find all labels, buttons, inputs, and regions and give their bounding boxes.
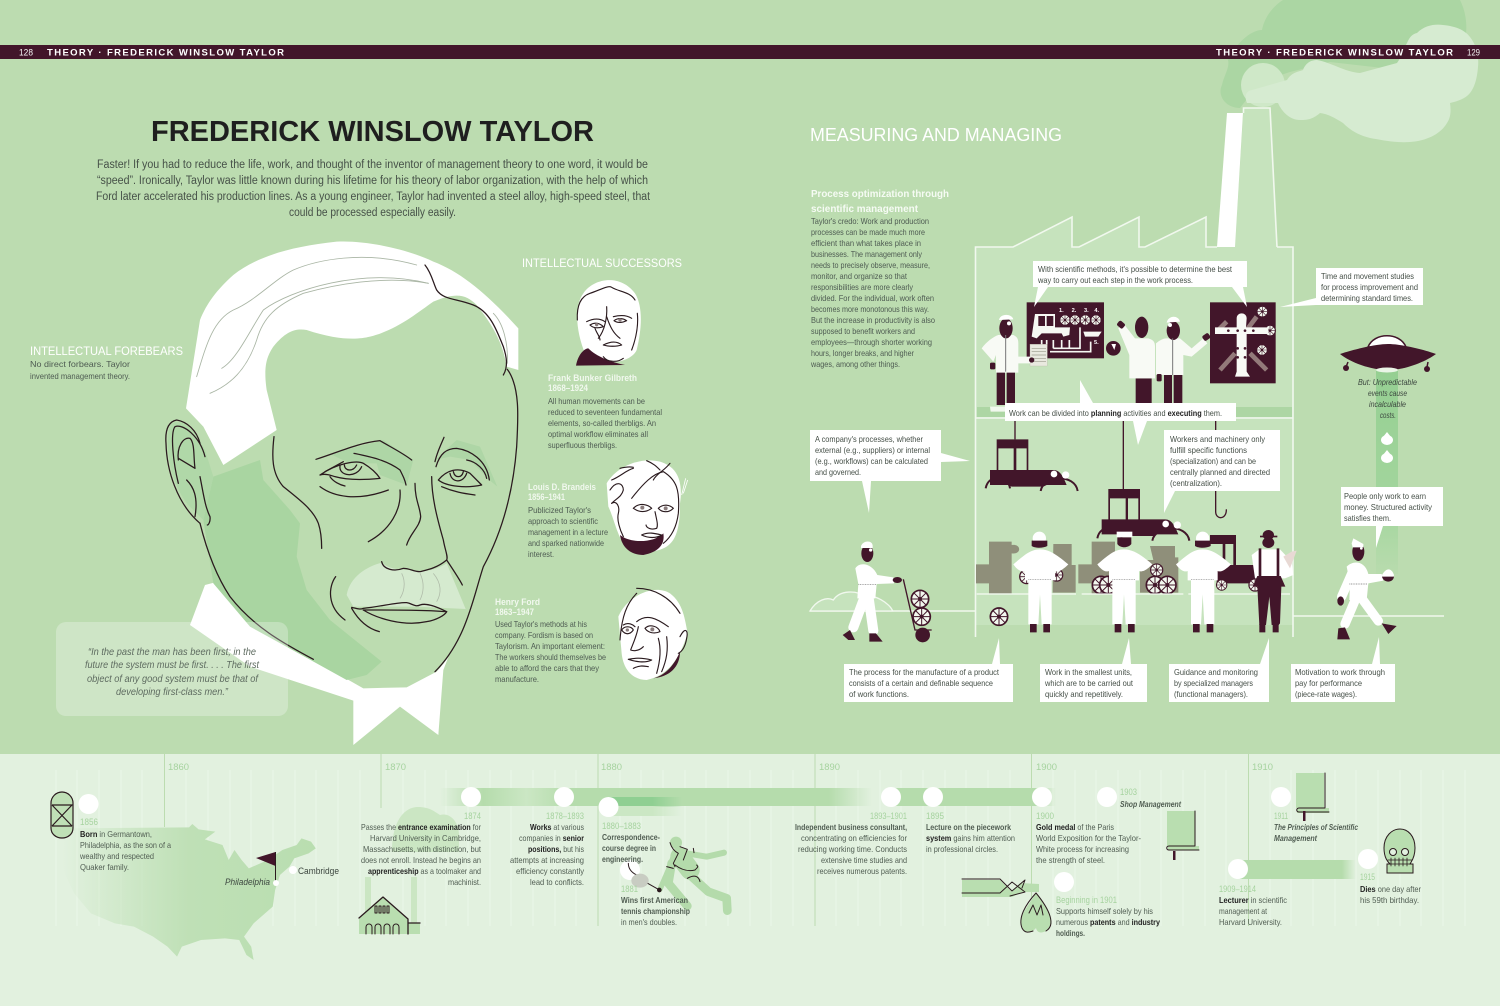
text: Gilbreth: superfluous therbligs. (548, 441, 617, 450)
planning board: 1. (1059, 308, 1064, 314)
callout: time and movement: determining standard times. (1321, 294, 1413, 303)
icon: swaddled baby (51, 792, 73, 838)
intro paragraph: “speed”. Ironically, Taylor was little known during his lifetime for his theory of labor organization, with the help of which (97, 175, 648, 187)
text: process optimization: divided. For the individual, work often (811, 294, 934, 303)
event: 1900: World Exposition for the Taylor- (1036, 834, 1141, 843)
callout: guidance (1169, 638, 1269, 702)
UFO (1340, 336, 1436, 574)
callout: company processes: external (e.g., suppliers) or internal (815, 446, 930, 455)
event: 1856 (79, 817, 171, 872)
callout: guidance: by specialized managers (1174, 679, 1253, 688)
worker two (1097, 532, 1152, 632)
callout: planning and executing (1005, 380, 1236, 445)
event: 1880-1883: Correspondence- (602, 833, 660, 842)
event: 1895: 1895 (926, 811, 944, 821)
text: Brandeis: and sparked nationwide (528, 539, 604, 548)
intellectual forebears: invented management theory. (30, 372, 130, 381)
event: 1911: Management (1274, 834, 1317, 843)
face line drawing (166, 265, 518, 672)
text: process optimization: monitor, and organize so that (811, 272, 908, 281)
light cloud (1246, 25, 1478, 142)
event: 1881: in men's doubles. (621, 918, 677, 927)
portrait: Ford (618, 588, 688, 680)
event: 1901: numerous patents and industry (1056, 918, 1160, 927)
event: 1856: wealthy and respected (79, 852, 154, 861)
planning board: 5. (1094, 340, 1099, 346)
header bar: THEORY · FREDERICK WINSLOW TAYLOR (47, 48, 284, 58)
text: Ford: 1863–1947 (495, 607, 534, 617)
UFO caption: But: Unpredictable (1358, 378, 1417, 387)
decade lines (164, 754, 1248, 926)
callout: smallest units: which are to be carried out (1044, 679, 1134, 688)
text: Gilbreth: 1868–1924 (548, 383, 588, 393)
text: Ford: Henry Ford (495, 597, 540, 607)
face shadow (203, 460, 382, 680)
event: 1911: 1911 (1274, 811, 1288, 821)
text: Ford: able to afford the cars that they (495, 664, 600, 673)
intellectual forebears (30, 344, 183, 381)
icon: book 1903 (1167, 811, 1199, 860)
event: 1856: Quaker family. (80, 863, 129, 872)
event: 1895 (926, 811, 1015, 854)
text: process optimization (810, 188, 949, 369)
event: 1874: Massachusetts, with distinction, but (363, 845, 482, 854)
heading: measuring and managing: MEASURING AND MANAGING (810, 125, 1062, 145)
ground lines (810, 611, 1444, 616)
event: 1915: his 59th birthday. (1360, 896, 1419, 905)
callout: process for manufacture (844, 638, 1013, 702)
upper floor band (977, 407, 1292, 417)
callout: workers and machinery: fulfill specific functions (1170, 446, 1247, 455)
text: Gilbreth: optimal workflow eliminates all (548, 430, 648, 439)
text: Brandeis: interest. (528, 550, 554, 559)
text: process optimization: wages, among other things. (810, 360, 900, 369)
event: 1880-1883: course degree in (602, 844, 656, 853)
callout: planning and executing: Work can be divided into planning activities and executing them. (1009, 409, 1222, 418)
icon: skull (1384, 829, 1415, 873)
event: 1900: 1900 (1036, 811, 1054, 821)
text: Brandeis: approach to scientific (528, 517, 598, 526)
text: Brandeis: 1856–1941 (528, 492, 565, 502)
worker three (1176, 532, 1231, 632)
callout: guidance: Guidance and monitoring (1174, 668, 1258, 677)
header bar: 129 (1467, 48, 1480, 58)
event: 1881 (621, 884, 690, 927)
text: Ford: The workers should themselves be (495, 653, 606, 662)
worker with money bag (1337, 538, 1397, 639)
callout: process for manufacture: of work functions. (849, 690, 909, 699)
text: Brandeis (528, 482, 608, 559)
event: 1881: 1881 (621, 884, 638, 894)
event: 1856: Philadelphia, as the son of a (80, 841, 171, 850)
decade labels: 1900 (1036, 762, 1057, 772)
text: Gilbreth: elements, so-called therbligs. An (548, 419, 656, 428)
event: 1893-1901: concentrating on efficiencies for (801, 834, 907, 843)
quote text: object of any good system must be that of (87, 673, 259, 685)
hanging car one (986, 439, 1078, 491)
UFO caption: costs. (1380, 411, 1396, 420)
callout: people work: money. Structured activity (1344, 503, 1433, 512)
quote text: developing first-class men.” (116, 686, 228, 698)
tractor beam (1376, 369, 1398, 574)
event: 1911 (1274, 811, 1358, 843)
callout: time and movement: for process improvement and (1321, 283, 1418, 292)
flag: Philadelphia (225, 852, 279, 887)
text: process optimization: needs to precisely observe, measure, (811, 261, 930, 270)
intellectual successors heading: INTELLECTUAL SUCCESSORS (522, 256, 682, 270)
event: 1880-1883 (602, 821, 660, 864)
event: 1915: Dies one day after (1360, 885, 1421, 894)
event: 1878-1893: attempts at increasing (510, 856, 584, 865)
event: 1874 (361, 811, 482, 887)
text: Ford: company. Fordism is based on (495, 631, 593, 640)
event: 1903: 1903 (1120, 787, 1137, 797)
UFO body (1340, 344, 1436, 370)
event: 1900: Gold medal of the Paris (1036, 823, 1114, 832)
quote text (85, 646, 260, 698)
callout: time and movement (1280, 268, 1423, 307)
event: 1893-1901: 1893–1901 (870, 811, 907, 821)
planning board: 4. (1094, 308, 1099, 314)
timeline markers (78, 787, 1378, 892)
callout: people work: People only work to earn (1344, 492, 1426, 501)
portrait: Brandeis (607, 460, 688, 555)
worker with light bulb (1106, 317, 1155, 403)
face (187, 297, 517, 688)
event: 1901: Supports himself solely by his (1056, 907, 1153, 916)
callout: company processes (810, 430, 970, 513)
callout: motivation (1291, 637, 1395, 702)
intellectual forebears: No direct forbears. Taylor (30, 360, 130, 369)
walking worker with cart (843, 541, 932, 642)
timeline bars (440, 788, 1356, 879)
conveyor arrows (977, 592, 1290, 596)
text: Brandeis: management in a lecture (528, 528, 608, 537)
planning board (1027, 302, 1104, 366)
UFO caption: events cause (1368, 389, 1407, 398)
event: 1874: 1874 (464, 811, 481, 821)
event: 1903 (1120, 787, 1181, 809)
event: 1878-1893: Works at various (530, 823, 584, 832)
hanging lines and hook (1015, 420, 1226, 518)
event: 1909-1914 (1219, 884, 1287, 927)
event: 1856: Born in Germantown, (80, 830, 152, 839)
callout: people work (1341, 487, 1443, 548)
quote box (56, 622, 288, 716)
event: 1881: tennis championship (621, 907, 690, 916)
event: 1893-1901: receives numerous patents. (817, 867, 907, 876)
callout: company processes: A company's processes, whether (815, 435, 923, 444)
portraits of successors (576, 280, 688, 680)
callout: time and movement: Time and movement studies (1321, 272, 1414, 281)
decade labels: 1860 (168, 762, 189, 772)
text: process optimization: hours, longer breaks, and higher (811, 349, 914, 358)
event: 1895: system gains him attention (926, 834, 1015, 843)
portrait: Gilbreth (576, 280, 641, 366)
callout: smallest units: quickly and repetitively. (1045, 690, 1123, 699)
text: Ford: Taylorism. An important element: (495, 642, 605, 651)
collar and bow tie (190, 530, 483, 745)
event: 1911: The Principles of Scientific (1274, 823, 1358, 832)
text: Ford: manufacture. (495, 675, 539, 684)
callout: scientific methods: way to carry out each step in the work process. (1037, 276, 1193, 285)
event: 1880-1883: engineering. (602, 855, 643, 864)
event: 1915: 1915 (1360, 872, 1375, 882)
event: 1909-1914: Harvard University. (1219, 918, 1282, 927)
intro paragraph (96, 159, 651, 219)
lower floor and outside illustration (810, 420, 1297, 642)
text: Brandeis: Publicized Taylor's (528, 506, 591, 515)
event: 1878-1893: lead to conflicts. (530, 878, 584, 887)
title: FREDERICK WINSLOW TAYLOR (151, 116, 594, 148)
white chimney (1217, 113, 1243, 247)
quote text: “In the past the man has been first; in the (88, 646, 256, 658)
callout: motivation: Motivation to work through (1295, 668, 1385, 677)
intro paragraph: could be processed especially easily. (289, 207, 456, 219)
event: 1900: White process for increasing (1036, 845, 1129, 854)
event: 1878-1893: 1878–1893 (546, 811, 584, 821)
racket (631, 874, 649, 888)
outlined chimney (1235, 108, 1277, 247)
car three (1210, 535, 1257, 583)
callout: workers and machinery: centrally planned and directed (1170, 468, 1270, 477)
callout: scientific methods (1033, 261, 1247, 307)
callout: people work: satisfies them. (1344, 514, 1391, 523)
event: 1901: holdings. (1056, 929, 1085, 938)
event: 1901 (1056, 895, 1160, 938)
event: 1895: Lecture on the piecework (926, 823, 1011, 832)
event: 1893-1901: extensive time studies and (821, 856, 907, 865)
map of the United States (62, 824, 316, 960)
callout: company processes: (e.g., workflows) can be calculated (815, 457, 928, 466)
text: process optimization: processes can be made much more (811, 228, 925, 237)
decade labels: 1880 (601, 762, 622, 772)
decade labels: 1910 (1252, 762, 1273, 772)
event: 1900: the strength of steel. (1036, 856, 1105, 865)
decade labels: 1890 (819, 762, 840, 772)
icon: book 1911 (1296, 773, 1329, 821)
callout: workers and machinery (1164, 430, 1280, 513)
worker one (1013, 532, 1068, 632)
planning board: 2. (1072, 308, 1077, 314)
text: process optimization: becomes more monotonous this way. (811, 305, 929, 314)
intro paragraph: Ford later accelerated his production lines. As a young engineer, Taylor had invented a steel alloy, high-speed steel, that (96, 191, 651, 203)
callout: smallest units: Work in the smallest units, (1045, 668, 1132, 677)
decade labels (168, 762, 1273, 772)
text: Ford (495, 597, 606, 684)
puff near chimney (1241, 63, 1285, 107)
flag: Philadelphia: Philadelphia (225, 877, 270, 887)
intro paragraph: Faster! If you had to reduce the life, work, and thought of the inventor of management theory to one word, it would be (97, 159, 648, 171)
event: 1874: Harvard University in Cambridge, (370, 834, 481, 843)
callout: company processes: and governed. (815, 468, 861, 477)
event: 1893-1901: Independent business consultant, (795, 823, 907, 832)
text: Gilbreth (548, 373, 662, 450)
portrait: Frederick Winslow Taylor (166, 241, 518, 745)
wheels (990, 564, 1261, 625)
callout: workers and machinery: Workers and machinery only (1170, 435, 1266, 444)
worker with clipboard (982, 315, 1034, 412)
label: Cambridge: Cambridge (298, 866, 339, 876)
timeline (0, 754, 1500, 1006)
event: 1893-1901 (795, 811, 907, 876)
event: 1874: Passes the entrance examination for (361, 823, 481, 832)
UFO caption: incalculable (1369, 400, 1406, 409)
UFO dome (1368, 336, 1406, 347)
text: Brandeis: Louis D. Brandeis (528, 482, 596, 492)
event: 1901: Beginning in 1901 (1056, 895, 1117, 905)
event: 1878-1893: positions, but his (528, 845, 584, 854)
factory building (810, 108, 1444, 637)
event: 1874: machinist. (448, 878, 481, 887)
callout: smallest units (1040, 638, 1147, 702)
intellectual forebears: INTELLECTUAL FOREBEARS (30, 344, 183, 358)
text: Gilbreth: Frank Bunker Gilbreth (548, 373, 637, 383)
callout: process for manufacture: consists of a certain and definable sequence (849, 679, 993, 688)
event: 1900 (1036, 811, 1141, 865)
decade labels: 1870 (385, 762, 406, 772)
upper floor illustration (982, 302, 1276, 412)
text: process optimization: scientific management (811, 203, 918, 215)
factory walls and roof (976, 217, 1293, 625)
event: 1874: does not enroll. Instead he begins an (361, 856, 481, 865)
callout: scientific methods: With scientific methods, it's possible to determine the best (1038, 265, 1233, 274)
yearly ticks (56, 770, 1465, 926)
left page header: 128 (19, 48, 33, 58)
icon: tennis player (628, 837, 727, 911)
text: process optimization: responsibilities are more clearly (811, 283, 914, 292)
text: Gilbreth: reduced to seventeen fundamental (548, 408, 662, 417)
callout: guidance: (functional managers). (1174, 690, 1248, 699)
event: 1881: Wins first American (621, 896, 688, 905)
event: 1909-1914: Lecturer in scientific (1219, 896, 1287, 905)
dark cloud (1221, 0, 1466, 108)
planning board: 3. (1084, 308, 1089, 314)
cloud outline (810, 592, 893, 611)
event: 1874: apprenticeship as a toolmaker and (368, 867, 481, 876)
UFO caption (1358, 378, 1417, 420)
callout: workers and machinery: (centralization). (1170, 479, 1222, 488)
icon: flame (1021, 893, 1051, 932)
car parts (976, 542, 1178, 593)
event: 1878-1893 (510, 811, 585, 887)
hanging car two (1097, 489, 1189, 541)
header bar (0, 45, 1500, 59)
event: 1856: 1856 (80, 817, 98, 827)
quote text: future the system must be first. . . . The first (85, 659, 260, 671)
text: process optimization: efficient than what takes place in (811, 239, 921, 248)
manager (1252, 530, 1297, 632)
callout: workers and machinery: (specialization) and can be (1170, 457, 1256, 466)
motion study board (1210, 302, 1276, 383)
hair (186, 241, 518, 465)
moustache (347, 563, 466, 609)
event: 1878-1893: companies in senior (519, 834, 585, 843)
money bags (1381, 432, 1393, 463)
event: 1903: Shop Management (1120, 800, 1181, 809)
event: 1895: in professional circles. (926, 845, 998, 854)
text: process optimization: businesses. The management only (811, 250, 923, 259)
player silhouette (660, 853, 727, 911)
callout: motivation: pay for performance (1295, 679, 1362, 688)
icon: Harvard building and cloud (359, 807, 459, 934)
text: process optimization: Taylor's credo: Work and production (811, 217, 929, 226)
event: 1909-1914: 1909–1914 (1219, 884, 1256, 894)
text: process optimization: But the increase in productivity is also (811, 316, 935, 325)
timeline background (0, 754, 1500, 1006)
text: Ford: Used Taylor's methods at his (495, 620, 587, 629)
smoke clouds (1221, 0, 1478, 142)
text: process optimization: supposed to benefit workers and (811, 327, 915, 336)
text: Gilbreth: All human movements can be (548, 397, 645, 406)
callout: process for manufacture: The process for the manufacture of a product (849, 668, 1000, 677)
worker pointing (1156, 317, 1211, 403)
event: 1909-1914: management at (1219, 907, 1268, 916)
event: 1878-1893: efficiency constantly (516, 867, 585, 876)
text: process optimization: employees—through shorter working (811, 338, 932, 347)
header bar: THEORY · FREDERICK WINSLOW TAYLOR (1216, 48, 1453, 58)
event: 1880-1883: 1880–1883 (602, 821, 641, 831)
event: 1893-1901: reducing working time. Conducts (798, 845, 907, 854)
text: process optimization: Process optimization through (811, 188, 949, 200)
player outline (628, 843, 700, 882)
callout: motivation: (piece-rate wages). (1295, 690, 1357, 699)
icon: tongs (962, 879, 1039, 897)
event: 1915 (1360, 872, 1421, 905)
